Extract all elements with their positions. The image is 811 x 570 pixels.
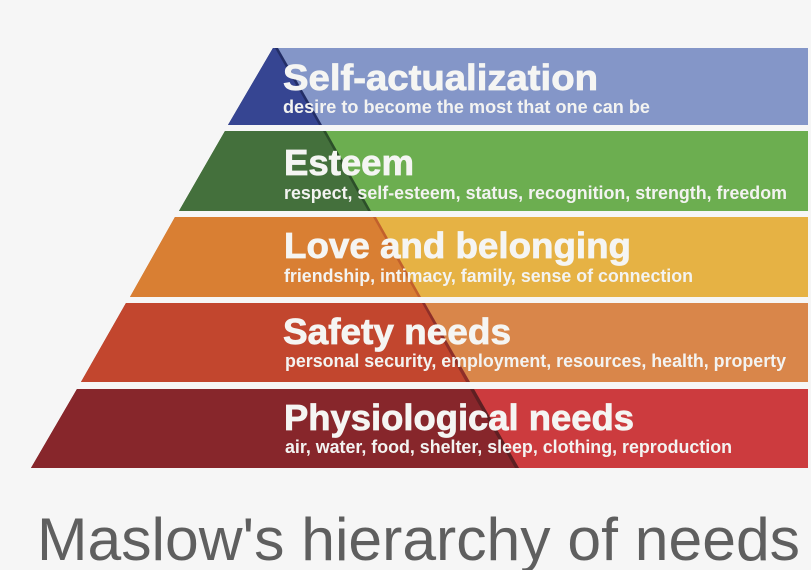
level: safety needs: personal security, employment, resources, health, property <box>285 350 787 371</box>
level: self-actualization: Self-actualization <box>283 57 598 98</box>
level: esteem <box>179 131 808 211</box>
level: love and belonging <box>130 217 808 297</box>
level: self-actualization: desire to become the most that one can be <box>283 96 650 117</box>
level: love and belonging: Love and belonging <box>284 225 631 266</box>
level: physiological needs: air, water, food, shelter, sleep, clothing, reproduction <box>285 436 732 457</box>
level: self-actualization <box>228 48 808 125</box>
level: esteem: respect, self-esteem, status, recognition, strength, freedom <box>284 182 787 203</box>
level: esteem: Esteem <box>284 142 414 183</box>
level: physiological needs: Physiological needs <box>284 397 634 438</box>
level: physiological needs <box>31 389 808 468</box>
level: safety needs: Safety needs <box>283 311 511 352</box>
level: love and belonging: friendship, intimacy, family, sense of connection <box>284 265 693 286</box>
level: safety needs <box>81 303 808 382</box>
pyramid <box>31 48 808 468</box>
